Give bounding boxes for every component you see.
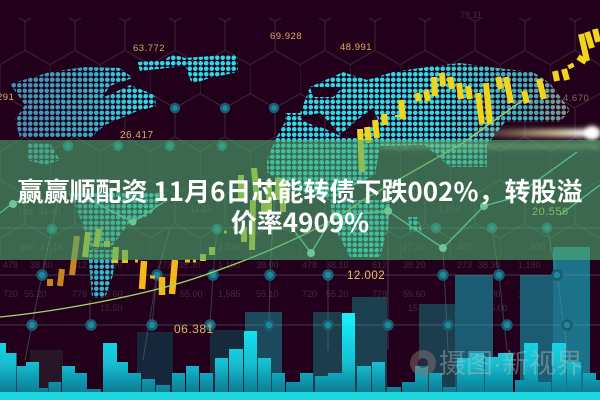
faint data table numbers: 11.90 xyxy=(350,204,372,214)
faint data table numbers: 500 xyxy=(530,242,545,252)
faint data table numbers: 273 xyxy=(157,260,172,270)
teal polyline with nodes xyxy=(0,152,600,257)
faint data table numbers: 612 xyxy=(72,260,87,270)
faint data table numbers xyxy=(3,10,578,313)
value labels: 4.670 xyxy=(563,93,589,104)
faint data table numbers: 27.15 xyxy=(40,242,63,252)
dotted world map xyxy=(10,54,570,298)
faint data table numbers: 720 xyxy=(3,289,18,299)
faint data table numbers: 720 xyxy=(302,289,317,299)
value labels xyxy=(0,31,589,336)
faint data table numbers: 560 xyxy=(20,242,35,252)
faint data table numbers: 38.30 xyxy=(178,260,201,270)
green title band xyxy=(0,140,600,260)
faint data table numbers: 78.11 xyxy=(460,10,482,20)
faint data table numbers: 779 xyxy=(372,289,387,299)
faint data table numbers: 55.60 xyxy=(100,289,123,299)
faint data table numbers: 34.60 xyxy=(38,207,61,217)
faint data table numbers: 38.00 xyxy=(555,260,578,270)
watermark logo xyxy=(410,350,436,376)
dim background bars xyxy=(30,247,590,400)
faint data table numbers: 7 xyxy=(468,303,473,313)
faint data table numbers: 55.00 xyxy=(478,289,501,299)
faint data table numbers: 1,585 xyxy=(518,289,541,299)
light green trend curve xyxy=(0,100,523,317)
value labels: 20.556 xyxy=(532,206,569,218)
faint data table numbers: 55.20 xyxy=(24,289,47,299)
watermark text: 摄图·新视界 xyxy=(439,349,583,379)
orange and yellow candlesticks xyxy=(360,29,598,172)
faint data table numbers: 38.20 xyxy=(100,260,123,270)
value labels: 48.991 xyxy=(340,42,372,53)
faint data table numbers: 55.00 xyxy=(180,289,203,299)
faint data table numbers: 467 xyxy=(457,242,472,252)
faint data table numbers: 55.20 xyxy=(326,289,349,299)
faint data table numbers: 38.80 xyxy=(30,260,53,270)
value labels: 63.772 xyxy=(133,43,165,54)
faint data table numbers: 108 xyxy=(18,207,33,217)
value labels: 26.417 xyxy=(120,130,154,141)
faint data table numbers: 11.25 xyxy=(190,204,212,214)
faint data table numbers: 55.10 xyxy=(555,289,578,299)
faint data table numbers: 478 xyxy=(3,260,18,270)
faint data table numbers: 779 xyxy=(72,289,87,299)
faint data table numbers: 38.00 xyxy=(256,260,279,270)
network grid lines and nodes xyxy=(0,190,600,360)
lens flare streak xyxy=(380,126,600,149)
faint data table numbers: 1,190 xyxy=(518,260,541,270)
faint data table numbers: 55.60 xyxy=(403,289,426,299)
faint data table numbers: 1,239 xyxy=(218,242,241,252)
bright cyan bar chart xyxy=(0,313,600,400)
faint data table numbers: 55.10 xyxy=(256,289,279,299)
faint data table numbers: 38.20 xyxy=(403,260,426,270)
faint data table numbers: 1,002 xyxy=(438,204,461,214)
faint data table numbers: 15.00 xyxy=(555,303,578,313)
faint data table numbers: 38.30 xyxy=(478,260,501,270)
faint data table numbers: 1,190 xyxy=(218,260,241,270)
faint data table numbers: 478 xyxy=(302,260,317,270)
faint data table numbers: 38.10 xyxy=(326,260,349,270)
faint data table numbers: 15.50 xyxy=(100,303,123,313)
value labels: 69.928 xyxy=(270,31,302,42)
faint data table numbers: 1,585 xyxy=(218,289,241,299)
faint data table numbers: 612 xyxy=(372,260,387,270)
value labels: 12.002 xyxy=(347,270,385,282)
faint data table numbers: 273 xyxy=(457,260,472,270)
faint data table numbers: 15.50 xyxy=(408,303,431,313)
faint data table numbers: 27.20 xyxy=(402,242,425,252)
faint data table numbers: 15.00 xyxy=(485,303,508,313)
value labels: 06.381 xyxy=(174,322,214,336)
title: 赢赢顺配资 11月6日芯能转债下跌002%，转股溢价率4909% xyxy=(18,172,582,240)
